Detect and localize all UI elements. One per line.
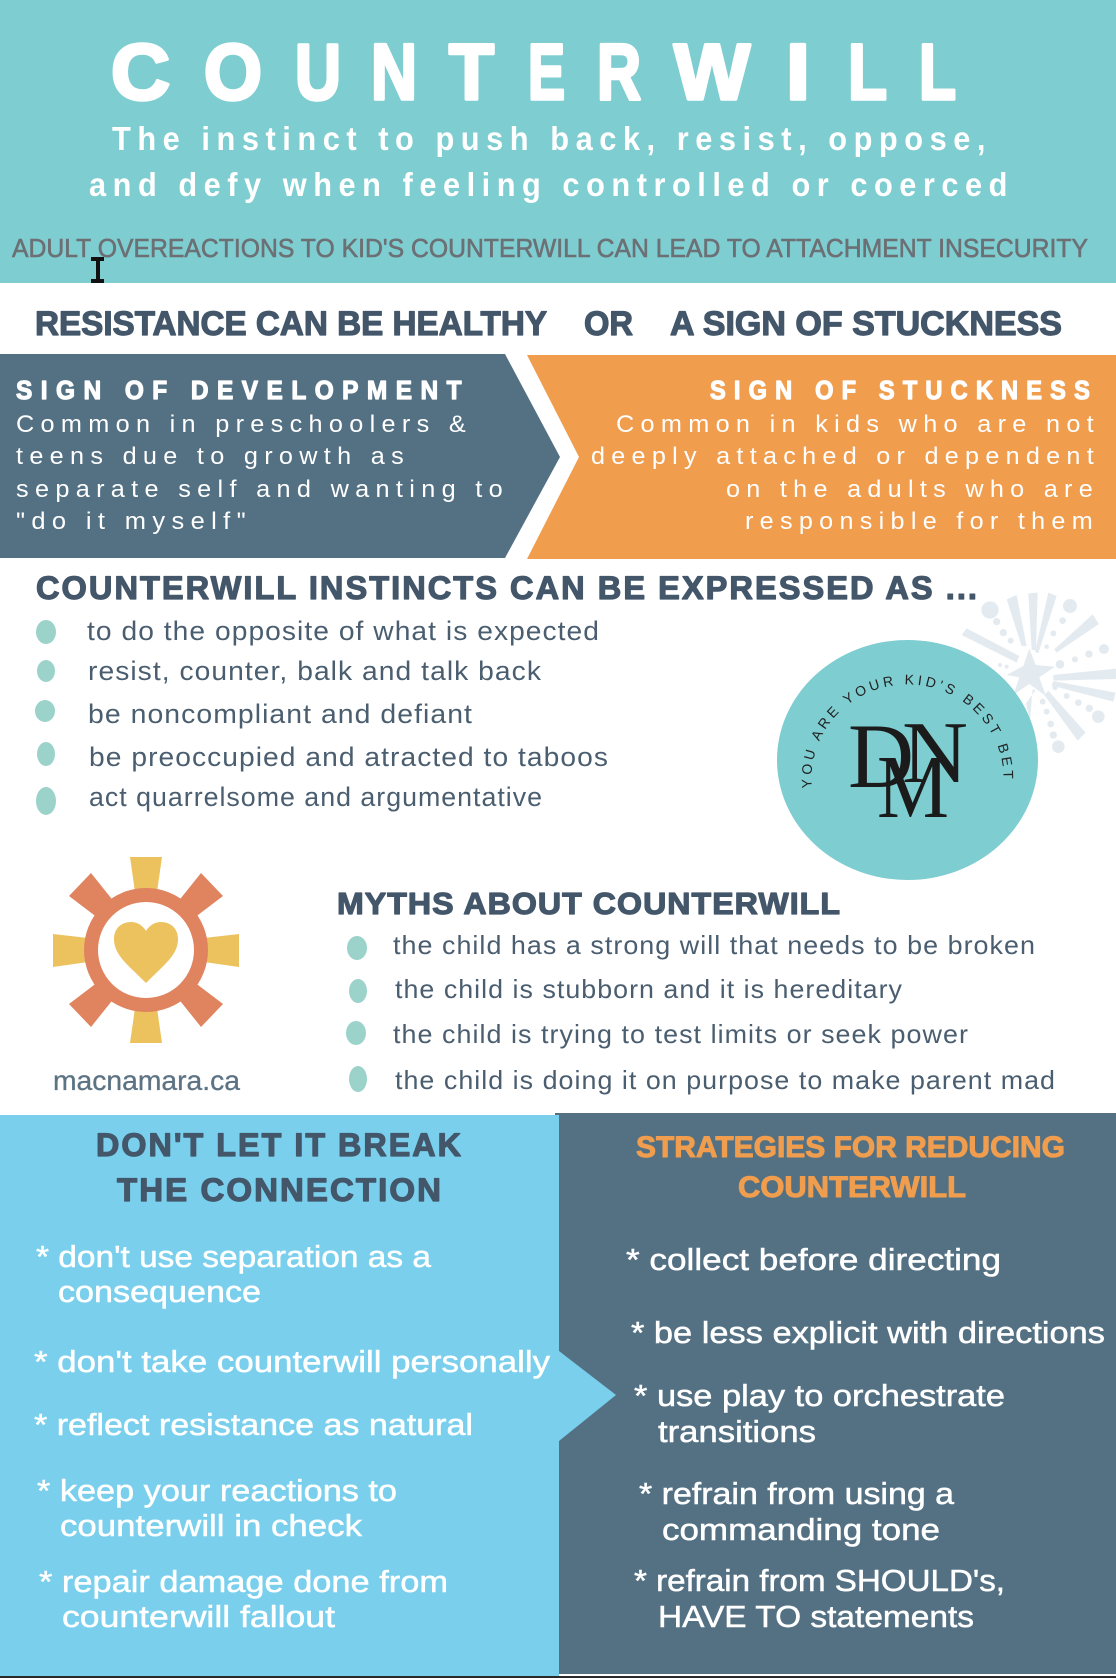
list: connection: * repair damage done from	[39, 1564, 448, 1599]
list: myths	[346, 930, 1056, 1095]
icon: sun heart logo	[53, 857, 239, 1043]
list: connection: counterwill in check	[60, 1508, 363, 1543]
footer rule	[0, 1676, 1116, 1678]
list: connection	[34, 1239, 551, 1634]
text block: development: separate self and wanting to	[16, 476, 509, 503]
heading: resistance or stuckness	[35, 305, 1062, 343]
text block: stuckness: responsible for them	[745, 508, 1099, 535]
badge curved text: YOU ARE YOUR KID'S BEST BET	[802, 674, 1014, 788]
title: R	[597, 27, 641, 116]
subtitle: The instinct to push back, resist, oppose,	[112, 120, 992, 157]
badge monogram: M	[877, 738, 949, 837]
list: strategies: * collect before directing	[626, 1242, 1001, 1277]
panel: strategies	[555, 1113, 1116, 1674]
heading: connection: THE CONNECTION	[117, 1172, 443, 1208]
list: connection: consequence	[58, 1274, 261, 1309]
panel: sign of stuckness	[527, 355, 1116, 559]
title: E	[528, 27, 565, 116]
badge monogram	[848, 705, 968, 837]
title: W	[674, 27, 750, 116]
warning line: ADULT OVEREACTIONS TO KID'S COUNTERWILL CAN LEAD TO ATTACHMENT INSECURITY	[12, 233, 1088, 263]
title: N	[371, 27, 417, 116]
list: instincts: resist, counter, balk and talk back	[88, 656, 542, 686]
badge: DNM logo	[777, 640, 1038, 880]
heading: instincts: COUNTERWILL INSTINCTS CAN BE EXPRESSED AS ...	[36, 570, 979, 606]
list: connection: * keep your reactions to	[37, 1473, 397, 1508]
heading: sign of development: SIGN OF DEVELOPMENT	[16, 375, 470, 405]
heading: resistance or stuckness: A SIGN OF STUCKNESS	[670, 305, 1062, 343]
icon: starburst	[962, 593, 1116, 753]
list: myths: the child has a strong will that needs to be broken	[393, 930, 1036, 960]
heading: resistance or stuckness: OR	[584, 305, 633, 343]
title: I	[786, 27, 810, 116]
subtitle	[89, 120, 1014, 203]
text block: stuckness: Common in kids who are not	[616, 411, 1100, 438]
title: C	[111, 27, 170, 116]
text block: development: teens due to growth as	[16, 443, 410, 470]
title: T	[449, 27, 494, 116]
list: myths: the child is stubborn and it is hereditary	[395, 974, 903, 1004]
panel: header	[0, 0, 1116, 283]
subtitle: and defy when feeling controlled or coerced	[89, 166, 1014, 203]
list: connection: counterwill fallout	[62, 1599, 335, 1634]
title: L	[919, 27, 956, 116]
list: strategies: * use play to orchestrate	[634, 1378, 1005, 1413]
list: strategies: * refrain from using a	[639, 1476, 955, 1511]
list: strategies: * refrain from SHOULD's,	[634, 1563, 1005, 1598]
title: U	[295, 27, 341, 116]
heading: connection	[96, 1127, 463, 1208]
logo caption: macnamara.ca	[53, 1065, 240, 1096]
heading: strategies: COUNTERWILL	[738, 1171, 966, 1204]
title: L	[848, 27, 887, 116]
list: instincts: act quarrelsome and argumentative	[89, 782, 543, 812]
badge monogram: N	[902, 705, 968, 802]
text block: development: Common in preschoolers &	[16, 411, 472, 438]
list: instincts: be preoccupied and atracted to taboos	[89, 742, 609, 772]
heading: resistance or stuckness: RESISTANCE CAN BE HEALTHY	[35, 305, 547, 343]
list: strategies: transitions	[658, 1414, 816, 1449]
text block: stuckness: deeply attached or dependent	[591, 443, 1100, 470]
list: instincts: be noncompliant and defiant	[88, 699, 473, 729]
list: connection: * reflect resistance as natural	[34, 1407, 473, 1442]
text block: development: "do it myself"	[16, 508, 252, 535]
text block: stuckness: on the adults who are	[726, 476, 1099, 503]
badge monogram: D	[848, 705, 914, 807]
text block: stuckness	[591, 411, 1100, 535]
list: strategies: * be less explicit with directions	[631, 1315, 1105, 1350]
heading: myths: MYTHS ABOUT COUNTERWILL	[337, 886, 841, 921]
list: instincts	[35, 616, 609, 815]
list: myths: the child is trying to test limits or seek power	[393, 1019, 969, 1049]
title: O	[204, 27, 262, 116]
heading: strategies	[636, 1131, 1065, 1204]
list: myths: the child is doing it on purpose to make parent mad	[395, 1065, 1056, 1095]
heading: connection: DON'T LET IT BREAK	[96, 1127, 463, 1163]
list: connection: * don't use separation as a	[36, 1239, 432, 1274]
text block: development	[16, 411, 509, 535]
panel: sign of development	[0, 354, 560, 558]
list: instincts: to do the opposite of what is expected	[87, 616, 600, 646]
heading: strategies: STRATEGIES FOR REDUCING	[636, 1131, 1065, 1164]
list: strategies: HAVE TO statements	[658, 1599, 974, 1634]
panel: don't let it break the connection	[0, 1115, 616, 1676]
list: strategies: commanding tone	[662, 1512, 940, 1547]
list: strategies	[626, 1242, 1105, 1634]
list: connection: * don't take counterwill personally	[34, 1344, 551, 1379]
icon: text cursor	[91, 257, 104, 283]
